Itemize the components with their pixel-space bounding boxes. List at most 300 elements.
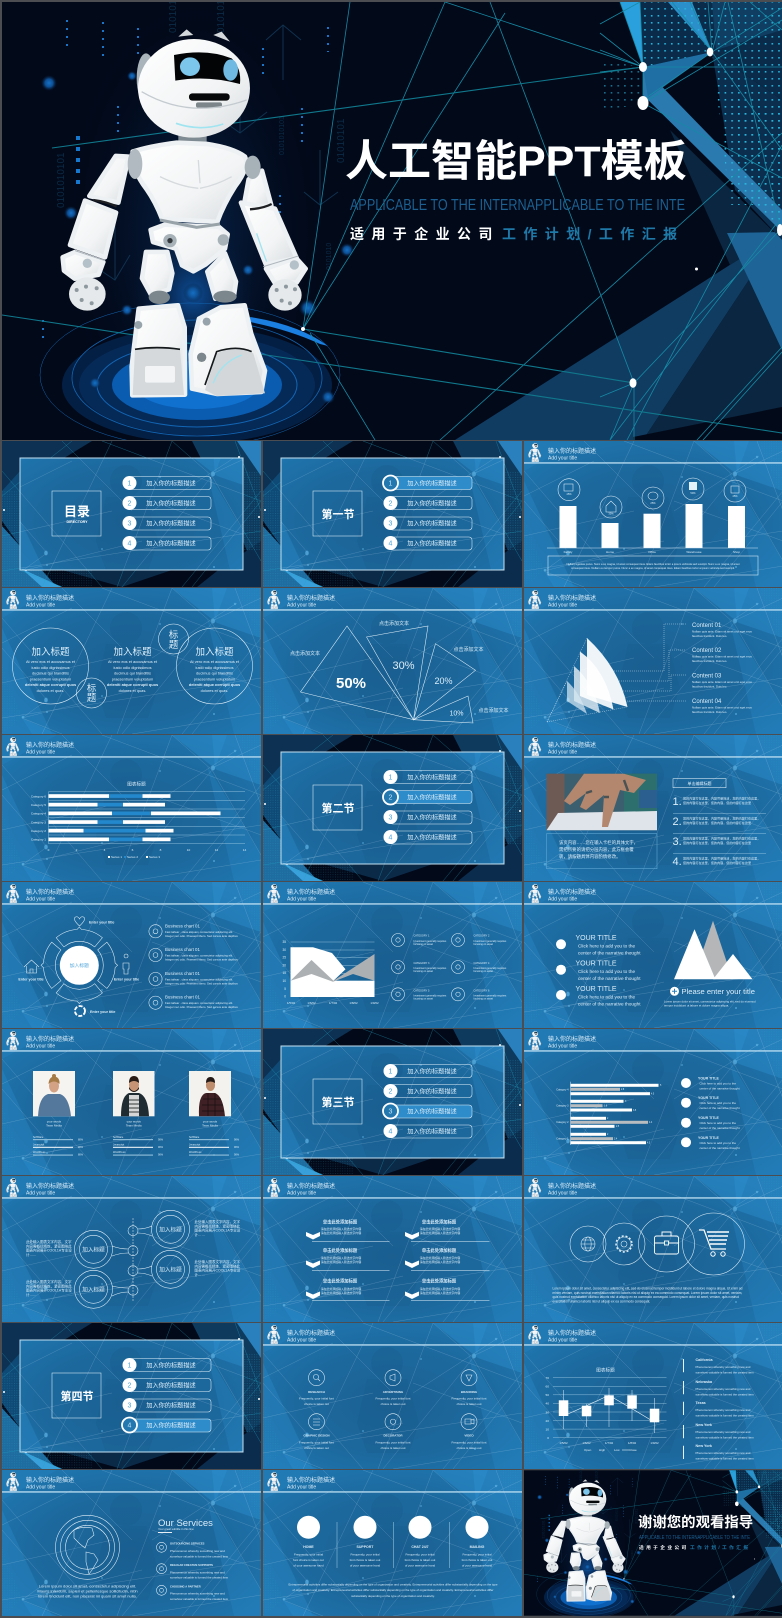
- menu list: [383, 1064, 472, 1138]
- header text: [287, 1182, 335, 1197]
- names: Team Media: [202, 1124, 218, 1128]
- menu list: 2: [389, 794, 393, 802]
- bubble text: 图表内容展开COOL1A专业设: [26, 1248, 72, 1253]
- triangles: [300, 626, 476, 723]
- slide: section three: [263, 1029, 522, 1175]
- icon text list: CATEGORY 5: [414, 990, 430, 992]
- states list: somehow valuable is formed the created item: [696, 1392, 754, 1396]
- stacked bar chart: 4: [104, 848, 106, 852]
- menu list: 加入你的标题描述: [407, 1128, 457, 1136]
- service text: GRAPHIC DESIGN: [303, 1434, 330, 1438]
- column text right: deleniti atque corrupti quos: [189, 682, 240, 687]
- numbered list: 您的内容打在这里，您的内容，您的内容打在这里: [683, 820, 751, 825]
- menu list: 加入你的标题描述: [407, 814, 457, 822]
- title list: Click here to add you to the: [578, 944, 635, 948]
- header text: Add your title: [548, 1191, 577, 1197]
- list text: 单击此处添加标题: [323, 1247, 358, 1254]
- header text: 输入你的标题描述: [26, 888, 74, 896]
- services list: [156, 1542, 229, 1601]
- hero chinese subtitle: 适用于企业公司: [350, 226, 500, 242]
- candlestick chart: High: [599, 1448, 606, 1452]
- header text: 输入你的标题描述: [548, 1035, 596, 1043]
- names: [46, 1120, 218, 1128]
- panel: [263, 735, 522, 881]
- clustered bar chart: 3: [625, 1101, 627, 1103]
- header text: 输入你的标题描述: [287, 1476, 335, 1484]
- dividers: [337, 1522, 450, 1568]
- column text left: deleniti atque corrupti quos: [25, 682, 76, 687]
- menu list: 加入你的标题描述: [146, 1422, 196, 1430]
- section box: [313, 491, 362, 536]
- text box: Nullam egestas purus. Nunc a ex magna, id amet consequat risus. Etiam faucibus tortor a ipsum vehicula sed suscipit. Nunc a ex magna, id amet: [567, 562, 740, 566]
- list text: 请在此处添加输入简洁文字内容: [321, 1230, 361, 1235]
- bar chart: Family: [564, 550, 573, 554]
- column text middle: [107, 646, 158, 693]
- slide: layered fan: [524, 588, 782, 734]
- services list: REGULAR CREATIVE SUPPORTS: [170, 1563, 213, 1567]
- skill bars: Javascript: [33, 1144, 45, 1146]
- stacked bar chart: Category 5: [31, 803, 46, 807]
- right list: Fast tailwar . class aliquam. consectetur adipiscing elit.: [165, 930, 233, 934]
- title list: YOUR TITLE: [576, 935, 617, 942]
- services list: Phenomenon whereby something new and: [170, 1570, 225, 1574]
- skill bars: Javascript: [113, 1144, 125, 1146]
- states list: Nebraska: [696, 1380, 713, 1384]
- icon text list: CATEGORY 4: [474, 962, 490, 965]
- closing chinese subtitle: 适用于企业公司: [639, 1544, 689, 1551]
- clustered bar chart: 2.4: [614, 1138, 618, 1140]
- circles: 题: [87, 693, 97, 704]
- white circles: [297, 1516, 488, 1539]
- clustered bar chart: 5: [660, 1085, 662, 1087]
- photo 2: [113, 1071, 154, 1116]
- icon text list: Investment generally requires: [474, 940, 507, 943]
- dot list: center of the narrative thought: [700, 1086, 740, 1090]
- column text: of your awesome hand: [293, 1564, 324, 1568]
- states list: California: [696, 1358, 713, 1362]
- dot list: YOUR TITLE: [698, 1136, 719, 1140]
- header text: [26, 1035, 74, 1050]
- menu list: 加入你的标题描述: [146, 540, 196, 548]
- stacked bar chart: Category 6: [31, 794, 46, 798]
- header text: Add your title: [26, 1485, 55, 1491]
- numbered list: 您的内容打在这里，内容尽量简洁，您的内容打在这里，: [683, 816, 760, 820]
- header text: [287, 594, 335, 609]
- menu list: 加入你的标题描述: [407, 1067, 457, 1075]
- bubble text: 此处输入图表文字内容，文字: [26, 1279, 72, 1284]
- slide: six services: [263, 1323, 522, 1469]
- header text: [548, 594, 596, 609]
- header text: 输入你的标题描述: [548, 741, 596, 749]
- service text: Frequently, your initial font: [376, 1396, 411, 1400]
- menu list: 1: [128, 1362, 132, 1370]
- menu list: 4: [128, 1422, 132, 1430]
- candlestick chart: 0: [547, 1436, 549, 1440]
- icon text list: Investment generally requires: [414, 967, 447, 970]
- right list: Fast tailwar . class aliquam. consectetur adipiscing elit.: [165, 1001, 233, 1005]
- column text middle: ducimus qui blanditiis: [114, 671, 151, 676]
- slide: area chart: [263, 882, 522, 1028]
- paragraph: Lorem ipsum dolor sit amet, consectetur adipiscing elit.: [39, 1584, 136, 1588]
- bubble text: 内容需概括精炼，紧密围绕此: [194, 1223, 240, 1228]
- bubble text: [26, 1219, 241, 1297]
- service text: Frequently, your initial font: [376, 1440, 411, 1444]
- list text: 请在此处添加输入简洁文字内容: [420, 1226, 460, 1231]
- header text: Add your title: [26, 897, 55, 903]
- content list: Nullam quis ante. Etiam sit amet orci eget eros: [692, 680, 752, 684]
- slide: mountains: [524, 882, 782, 1028]
- icon: gear: [616, 1236, 632, 1252]
- stacked bar chart: Series 1: [111, 855, 122, 859]
- callouts: [290, 620, 509, 714]
- photo 1: [33, 1071, 75, 1116]
- mountain chart: [674, 921, 752, 979]
- services list: CHOOSING A PARTNER: [170, 1584, 201, 1588]
- slide: our services: [2, 1470, 261, 1616]
- closing english subtitle: APPLICABLE TO THE INTERNAPPLICABLE TO THE INTE: [639, 1535, 750, 1541]
- service text: DECORATOR: [383, 1434, 403, 1438]
- service text: Frequently, your initial font: [452, 1396, 487, 1400]
- paragraph: minim veniam, quis nostrud exercitation ullamco laboris nisi ut aliquip ex ea commodo consequat. Lorem ipsum dolor sit amet, veniam,: [552, 1291, 742, 1295]
- menu list: 加入你的标题描述: [407, 499, 457, 507]
- states list: Phenomenon whereby something new and: [696, 1408, 751, 1412]
- area chart: 25: [282, 956, 286, 960]
- caption: Lorem ipsum dolor sit amet, consectetur adipiscing elit, sed do eiusmod: [664, 1000, 756, 1004]
- menu list: 加入你的标题描述: [407, 540, 457, 548]
- service text: choice is taken out: [457, 1446, 482, 1450]
- menu list: 加入你的标题描述: [407, 479, 457, 487]
- menu list: 2: [389, 1088, 393, 1096]
- clustered bar chart: Category 2: [556, 1121, 569, 1124]
- column text: CHAT 24/7: [411, 1545, 429, 1549]
- header text: Add your title: [287, 897, 316, 903]
- column text middle: At vero eos et accusamus et: [108, 659, 158, 664]
- candlestick chart: Close: [629, 1448, 637, 1452]
- menu list: 4: [389, 834, 393, 842]
- menu list: 1: [389, 774, 393, 782]
- header text: 输入你的标题描述: [26, 1182, 74, 1190]
- skill bars: 90%: [78, 1146, 84, 1149]
- stacked bar chart: 12: [215, 848, 218, 852]
- dot list: Click here to add you to the: [700, 1101, 736, 1105]
- menu list: 加入你的标题描述: [146, 479, 196, 487]
- section box: [52, 1373, 101, 1418]
- list text: 请在此处添加输入简洁文字内容: [321, 1226, 361, 1231]
- list text: 单击此处添加标题: [422, 1247, 457, 1254]
- title list: center of the narrative thought: [578, 950, 641, 956]
- service text: Frequently, your initial font: [452, 1440, 487, 1444]
- skill bars: WordPress: [189, 1151, 202, 1154]
- title list: YOUR TITLE: [576, 960, 617, 968]
- menu list: [122, 476, 211, 550]
- column text: of your awesome hand: [462, 1564, 493, 1568]
- header text: Add your title: [548, 897, 577, 903]
- header text: [548, 741, 596, 756]
- our services heading: Our Services: [158, 1518, 213, 1529]
- service text: [299, 1390, 487, 1450]
- icon text list: CATEGORY 2: [474, 934, 490, 938]
- stacked bar chart: Series 3: [149, 855, 160, 859]
- dot list: center of the narrative thought: [700, 1146, 740, 1150]
- dot list: center of the narrative thought: [700, 1106, 740, 1110]
- candlestick chart: 10: [546, 1427, 549, 1431]
- area chart: 20: [282, 963, 286, 967]
- list text: 单击此处添加标题: [323, 1218, 358, 1226]
- states list: somehow valuable is formed the created item: [696, 1435, 754, 1439]
- closing chinese subtitle: 工作计划/工作汇报: [690, 1544, 750, 1551]
- list text: 单击此处添加标题: [422, 1278, 457, 1284]
- list text: 请在此处添加输入简洁文字内容: [420, 1259, 460, 1264]
- stacked bar chart: 10: [187, 848, 190, 852]
- area chart: [282, 940, 379, 1005]
- paragraph: Lorem ipsum dolor sit amet, consectetur adipiscing elit, sed do eiusmod tempor incididunt ut labore et dolore magna aliqua. Ut enim ad: [552, 1286, 743, 1290]
- slide: icon bar chart: [524, 441, 782, 587]
- column text left: [25, 646, 76, 693]
- column text right: [189, 646, 240, 693]
- bubble diagram: 加入标题: [82, 1286, 105, 1294]
- ring diagram: 加入标题: [70, 962, 89, 969]
- ring icons and labels: Enter your title: [18, 978, 44, 982]
- menu list: 4: [389, 540, 393, 548]
- clustered bar chart: 3.5: [633, 1110, 637, 1112]
- panel: [2, 441, 261, 587]
- content list: [692, 623, 752, 714]
- skill bars: 90%: [234, 1138, 240, 1142]
- header text: [548, 1182, 596, 1197]
- header text: [287, 1476, 335, 1491]
- menu list: 加入你的标题描述: [407, 773, 457, 781]
- header text: 输入你的标题描述: [26, 594, 74, 602]
- closing chinese subtitle: [639, 1544, 750, 1551]
- skill bars: Javascript: [189, 1144, 201, 1146]
- icon text list: CATEGORY 3: [414, 962, 430, 965]
- right list: Integer nec odio. Praesent libero. Sed cursus ante dapibus: [165, 934, 238, 938]
- panel: [2, 1323, 261, 1469]
- icon circles: [558, 478, 746, 518]
- paragraph: [37, 1584, 138, 1598]
- header text: [287, 1329, 335, 1344]
- names: Team Media: [46, 1124, 62, 1128]
- header text: [26, 888, 74, 903]
- stacked bar chart: Category 2: [31, 829, 46, 833]
- header text: 输入你的标题描述: [548, 594, 596, 602]
- skill bars: WordPress: [33, 1151, 46, 1154]
- caption: tempor incididunt ut labore et dolore magna aliqua.: [664, 1004, 729, 1008]
- candlestick chart: Open: [584, 1448, 592, 1452]
- header text: 输入你的标题描述: [548, 1182, 596, 1190]
- right list: Integer nec odio. Praesent libero. Sed cursus ante dapibus: [165, 958, 238, 962]
- menu list: 3: [389, 520, 393, 528]
- icon text list: focusing on asset: [474, 943, 493, 946]
- skill bars: 80%: [78, 1154, 84, 1156]
- states list: [684, 1358, 754, 1460]
- bubble diagram: [74, 1210, 190, 1308]
- bubble text: 图表内容展开COOL1A专业设: [194, 1268, 241, 1273]
- header text: 输入你的标题描述: [287, 594, 335, 602]
- right list: Business chart 01: [165, 924, 200, 928]
- title list: YOUR TITLE: [576, 986, 617, 993]
- clustered bar chart: [556, 1082, 662, 1145]
- slide: chevron list: [263, 1176, 522, 1322]
- service icons: [308, 1370, 477, 1430]
- skill bars: 80%: [78, 1138, 84, 1142]
- list text: 请在此处添加输入简洁文字内容: [321, 1255, 361, 1260]
- menu list: [383, 476, 472, 550]
- text box: [546, 834, 657, 869]
- bar chart: Shop: [733, 550, 740, 554]
- right list: Integer nec odio. Praesent libero. Sed cursus ante dapibus: [165, 1005, 238, 1009]
- circles: 标: [87, 682, 97, 694]
- candlestick chart: 1/5/02: [559, 1441, 568, 1445]
- header text: Add your title: [548, 1338, 577, 1344]
- content list: Content 04: [692, 699, 722, 705]
- clustered bar chart: 2.5: [616, 1126, 620, 1128]
- column text left: 加入标题: [31, 646, 70, 658]
- menu list: 加入你的标题描述: [146, 1402, 196, 1410]
- header text: 输入你的标题描述: [287, 888, 335, 896]
- globe: [56, 1515, 120, 1579]
- menu list: [383, 770, 472, 844]
- numbered list: 您的内容打在这里，您的内容，您的内容打在这里: [683, 840, 751, 845]
- numbered list: 您的内容打在这里，内容尽量简洁，您的内容打在这里，: [683, 796, 760, 800]
- right list: [149, 924, 238, 1009]
- numbered list: 您的内容打在这里，您的内容，您的内容打在这里: [683, 800, 751, 805]
- callouts: 点击添加文本: [453, 646, 484, 653]
- dot list: Click here to add you to the: [700, 1121, 736, 1125]
- ring icons and labels: Enter your title: [90, 1010, 115, 1014]
- title list: Click here to add you to the: [578, 969, 635, 974]
- header text: Add your title: [548, 750, 577, 756]
- skill bars: 90%: [158, 1154, 164, 1156]
- content list: Nullam quis ante. Etiam sit amet orci eget eros: [692, 630, 752, 634]
- area chart: 1/7/02: [329, 1001, 338, 1005]
- candlestick chart: 20: [546, 1419, 549, 1423]
- candlestick chart: 1/7/02: [605, 1441, 614, 1445]
- stacked bar chart: Category 4: [31, 812, 46, 816]
- connectors: [547, 624, 686, 722]
- section box: [52, 491, 101, 536]
- services list: OUTSOURCING SERVICES: [170, 1542, 205, 1546]
- slide: section four: [2, 1323, 261, 1469]
- column text middle: deleniti atque corrupti quos: [107, 682, 158, 687]
- our services heading: Your great subtitle in this line: [158, 1527, 194, 1531]
- icon text list: focusing on asset: [414, 943, 433, 946]
- header text: Add your title: [548, 1044, 577, 1050]
- button: 单击编辑标题: [688, 780, 712, 786]
- list text: [321, 1218, 460, 1295]
- list text: 请在此处添加输入简洁文字内容: [321, 1290, 361, 1295]
- icon text list: CATEGORY 6: [474, 990, 490, 992]
- names: Team Media: [126, 1124, 142, 1128]
- stacked bar chart: 0: [48, 848, 50, 852]
- slide: horizontal stacked bars: [2, 735, 261, 881]
- header text: 输入你的标题描述: [548, 1329, 596, 1337]
- header text: Add your title: [287, 1485, 316, 1491]
- menu list: 加入你的标题描述: [407, 834, 457, 842]
- dot list: Click here to add you to the: [700, 1082, 736, 1086]
- service text: choice is taken out: [381, 1446, 406, 1450]
- list text: 单击此处添加标题: [323, 1278, 358, 1284]
- icon: cart: [699, 1230, 729, 1256]
- slide: clustered bars: [524, 1029, 782, 1175]
- column text left: At vero eos et accusamus et: [26, 659, 76, 664]
- chart title: 图表标题: [596, 1366, 615, 1374]
- paragraph: exercitation ullamco laboris nisi ut aliquip ex ea commodo consequat.: [552, 1299, 650, 1303]
- menu list: 加入你的标题描述: [407, 1108, 457, 1116]
- list text: 请在此处添加输入简洁文字内容: [420, 1255, 460, 1260]
- menu list: 2: [128, 1382, 132, 1390]
- clustered bar chart: 2: [607, 1118, 609, 1120]
- states list: New York: [696, 1444, 713, 1448]
- service text: RESEARCH: [308, 1390, 325, 1394]
- column text middle: dolores et quas.: [119, 688, 146, 693]
- area chart: 15: [282, 971, 286, 975]
- content list: Content 02: [692, 648, 722, 654]
- stacked bar chart: Category 1: [31, 838, 46, 842]
- header text: Add your title: [287, 1191, 316, 1197]
- column text right: praesentium voluptatum: [194, 676, 235, 681]
- header text: 输入你的标题描述: [26, 741, 74, 749]
- hero slide: [2, 0, 782, 460]
- menu list: 2: [389, 500, 393, 508]
- callouts: 点击添加文本: [379, 620, 409, 627]
- names: your words: [127, 1120, 141, 1124]
- photo: robot hand on keyboard: [546, 774, 657, 830]
- slide: section two: [263, 735, 522, 881]
- states list: somehow valuable is formed the created item: [696, 1456, 754, 1460]
- text box: consequat risus. Nullam eu tempor purus. Nunc a ex magna, id amet consequat risus. Etiam faucibus tortor a ipsum vehicula sed suscipit.: [571, 566, 735, 570]
- ring icons and labels: Enter your title: [114, 978, 139, 982]
- column text right: 加入标题: [195, 646, 234, 658]
- bubble text: 此处输入图表文字内容，文字: [194, 1219, 240, 1224]
- header text: Add your title: [548, 456, 577, 462]
- menu list: 加入你的标题描述: [407, 1087, 457, 1095]
- icon text list: Investment generally requires: [474, 967, 507, 970]
- paragraph: Mauris interdum, sapien et pellentesque sollicitudin, nibh: [37, 1588, 138, 1594]
- clustered bar chart: 2.8: [621, 1089, 625, 1091]
- services list: Phenomenon whereby something new and: [170, 1592, 225, 1596]
- dot list: Click here to add you to the: [700, 1141, 736, 1145]
- icon circles: 50%: [690, 491, 696, 495]
- header text: [26, 594, 74, 609]
- column text left: dolores et quas.: [37, 688, 64, 693]
- list text: 请在此处添加输入简洁文字内容: [420, 1230, 460, 1235]
- list text: 请在此处添加输入简洁文字内容: [420, 1286, 460, 1291]
- area chart: 35: [282, 940, 286, 944]
- slide: directory: [2, 441, 261, 587]
- content list: faucibus tincidunt. Duis leo.: [692, 634, 727, 638]
- numbered list: 您的内容打在这里，内容尽量简洁，您的内容打在这里，: [683, 856, 760, 860]
- slide: team: [2, 1029, 261, 1175]
- column text right: dolores et quas.: [201, 688, 228, 693]
- text box: 该页内容……您在输入卡栏的具体文字，: [559, 839, 638, 846]
- percent labels: 10%: [449, 710, 464, 718]
- menu list: 2: [128, 500, 132, 508]
- bar chart: Warehouse: [686, 550, 702, 554]
- stacked bar chart: 14: [243, 848, 246, 852]
- slide: four icon circles: [524, 1176, 782, 1322]
- slide: section one: [263, 441, 522, 587]
- menu list: [122, 1358, 211, 1432]
- bubble diagram: 加入标题: [159, 1226, 182, 1234]
- area chart: 5: [284, 987, 286, 991]
- states list: New York: [696, 1423, 713, 1427]
- menu list: 加入你的标题描述: [146, 1381, 196, 1389]
- skill bars: 90%: [234, 1146, 240, 1149]
- column text: SUPPORT: [357, 1545, 374, 1549]
- text box: 需把所要的请把分层内容，此方框会覆: [559, 846, 634, 853]
- text box: [548, 556, 758, 575]
